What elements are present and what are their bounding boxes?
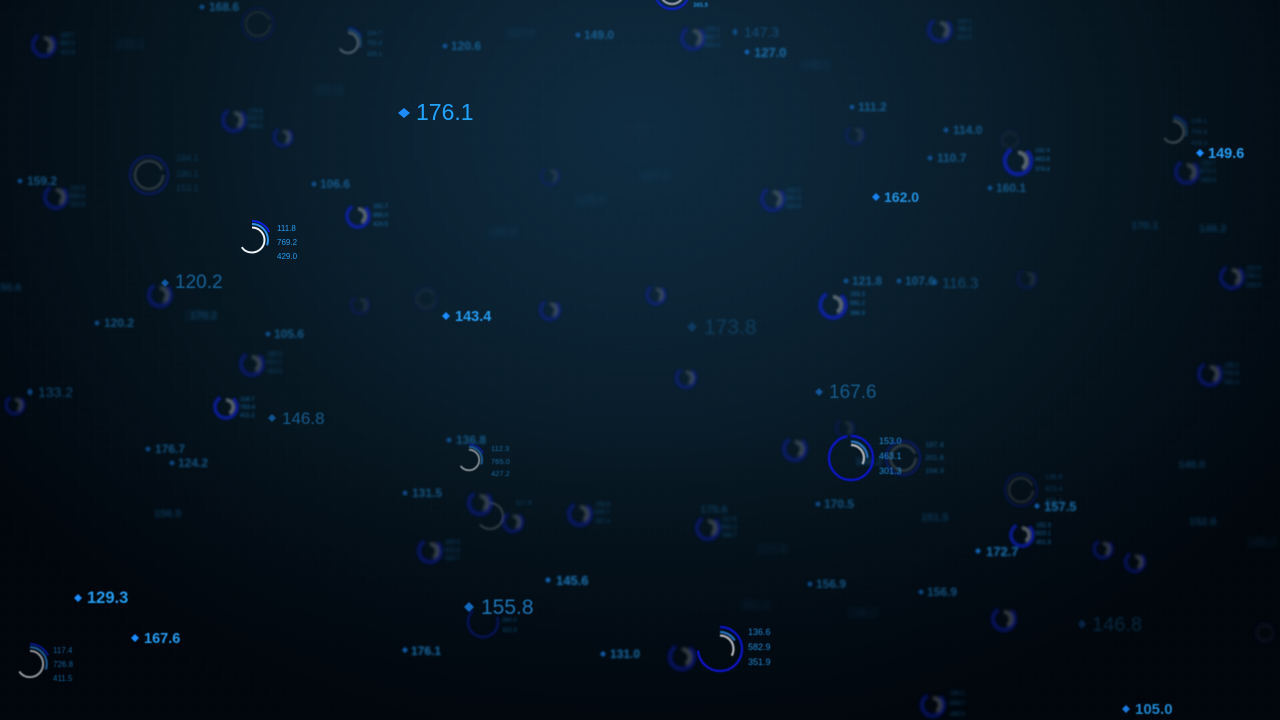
ring readout top center: 365.9 [693,3,709,9]
ring readout 1173 [1157,116,1208,148]
mid-depth blue donuts: 180.5 [267,352,283,358]
small blurred blue donuts with readouts: 161.7 [373,204,389,210]
small blurred data labels: 120.2 [104,316,134,330]
data label 131.0: 131.0 [610,647,640,661]
dim blurred data labels: 175.6 [700,504,728,516]
ring readout 153.0: 153.0 [879,436,902,446]
data label 146.8 left: 146.8 [282,409,325,428]
ring readout 149 left dim: 153.1 [176,183,199,193]
ring readout 469: 765.0 [491,457,510,466]
small blurred blue donuts with readouts: 763.4 [240,405,256,411]
small blurred data labels: 131.5 [412,486,442,500]
data label 172.7: 172.7 [986,544,1019,559]
small blurred data labels: 124.2 [178,456,208,470]
small blurred data labels: 105.6 [274,327,304,341]
small blurred blue donuts with readouts: 401.9 [1036,540,1052,546]
small blurred blue donuts with readouts [215,148,1052,546]
small blurred blue donuts with readouts: 374.4 [1035,167,1051,173]
small blurred blue donuts with readouts: 424.5 [373,222,389,228]
small blurred data labels: 170.5 [824,497,854,511]
faint far data labels [115,26,1277,620]
mid-depth blue donuts: 312.8 [70,202,86,208]
faint far data labels: 171.8 [757,542,787,556]
faint far data labels: 170.2 [184,308,214,322]
faint far data labels: 132.9 [313,83,343,97]
mid-depth blue donuts: 391.4 [1224,380,1240,386]
faint far data labels: 150.8 [505,26,535,40]
dim blurred data labels: 146.2 [1199,223,1227,235]
mid-depth blue donuts: 337.4 [595,519,611,525]
ring readout 153.0 [829,436,902,480]
faint far data labels: 146.0 [1247,535,1277,549]
mid-depth blue donuts: 140.2 [957,19,973,25]
mid-depth blue donuts: 682.7 [705,35,721,41]
small blurred data labels: 156.9 [927,585,957,599]
ring readout 348: 420.1 [367,52,383,58]
mid-depth blue donuts: 580.3 [786,196,802,202]
mid-depth blue donuts: 140.7 [60,33,76,39]
faint far data labels: 108.5 [800,58,830,72]
dim blurred data labels: 152.6 [1189,516,1217,528]
dim blurred data labels: 168.2 [855,456,883,468]
small blurred data labels: 107.6 [905,274,935,288]
small blurred data labels: 149.0 [584,28,614,42]
mid-depth blue donuts: 760.1 [1246,274,1262,280]
data label 143.4: 143.4 [455,309,491,325]
mid-depth blue donuts: 162.9 [1246,266,1262,272]
ring readout 490 faint: 117.6 [515,500,532,507]
ring readout 483: 360.0 [502,618,518,624]
faint far data labels: 156.2 [848,606,878,620]
data label 147.3: 147.3 [744,24,779,40]
mid-depth blue donuts: 765.3 [957,27,973,33]
dim blurred data labels: 151.5 [921,512,949,524]
data label 149.6: 149.6 [1208,146,1244,162]
faint far data labels: 151.0 [740,598,770,612]
ring readout 903: 187.4 [925,440,944,449]
data label 120.2: 120.2 [175,272,223,293]
ring readout 1173: 109.1 [1191,118,1208,125]
small blurred blue donuts with readouts: 366.9 [850,311,866,317]
small blurred data labels: 156.9 [816,577,846,591]
faint far rings [351,126,1274,642]
mid-depth blue donuts: 156.8 [595,502,611,508]
small blurred data labels [17,0,1026,599]
ring readout 903: 201.8 [925,453,944,462]
dim blurred data labels [0,220,1227,528]
faint far data labels: 126.3 [575,193,605,207]
mid-depth blue donuts: 310.7 [445,556,461,562]
ring readout 469: 112.3 [491,444,509,453]
ring readout 1021: 823.4 [1045,486,1063,493]
ring readout 903 [886,440,944,475]
small blurred data labels: 106.6 [320,177,350,191]
faint far data labels: 120.1 [115,37,145,51]
dim blurred data labels: 170.1 [1131,220,1159,232]
data label 157.5: 157.5 [1044,499,1077,514]
small blurred data labels: 176.7 [155,442,185,456]
mid-depth blue donuts: 522.1 [267,360,283,366]
small blurred data labels: 121.8 [852,274,882,288]
ring readout 903: 104.3 [925,466,944,475]
ring readout 30 lower left [10,644,74,684]
mid-depth blue donuts: 398.5 [248,124,264,130]
ring readout 111.8 [233,221,298,261]
mid-depth blue donuts: 412.5 [957,35,973,41]
data label 105.0: 105.0 [1135,701,1173,718]
ring readout 258 top [242,8,274,40]
ring readout 149 left dim: 180.1 [176,169,199,179]
dim blurred data labels: 146.0 [1178,459,1206,471]
mid-depth blue donuts: 422.8 [445,548,461,554]
dim blurred data labels: 156.5 [154,508,182,520]
ring readout 136.6 [698,627,771,671]
dim blurred data labels: 50.6 [0,282,21,294]
small blurred data labels: 160.1 [996,181,1026,195]
ring readout 1173: 754.8 [1191,129,1208,136]
ring readout 469: 427.2 [491,469,510,478]
small blurred data labels: 168.6 [209,0,239,14]
mid-depth blue donuts: 160.9 [445,540,461,546]
ring readout 30 lower left: 726.8 [53,660,74,669]
mid-depth blue donuts: 412.6 [60,50,76,56]
small blurred data labels: 159.2 [27,174,57,188]
ring readout 153.0: 463.1 [879,451,902,461]
mid-depth blue donuts: 410.3 [267,369,283,375]
ring readout 111.8: 429.0 [277,252,298,261]
mid-depth blue donuts: 480.5 [950,712,966,718]
small blurred blue donuts with readouts: 163.3 [850,292,866,298]
data label 155.8: 155.8 [481,596,534,619]
ring readout 153.0: 301.3 [879,466,902,476]
mid-depth blue donuts: 142.1 [786,188,802,194]
data label 116.3: 116.3 [942,275,978,292]
mid-depth blue donuts: 702.6 [1224,371,1240,377]
data label 133.2: 133.2 [38,384,73,400]
small blurred data labels: 136.8 [456,433,486,447]
ring readout 1173: 419.3 [1191,140,1208,147]
ring readout 30 lower left: 411.5 [53,674,73,683]
ring readout 136.6: 351.9 [748,657,771,667]
ring readout 111.8: 111.8 [277,224,296,233]
ring readout 483: 302.9 [502,628,518,634]
mid-depth blue donuts: 155.2 [1224,363,1240,369]
data label 173.8: 173.8 [704,316,757,339]
small blurred data labels: 120.6 [451,39,481,53]
dim blurred data labels: 170.2 [190,310,218,322]
data label 167.6 lower left: 167.6 [144,631,180,647]
small blurred data labels: 114.0 [953,123,983,137]
ring readout 30 lower left: 117.4 [53,646,73,655]
ring readout 136.6: 582.9 [748,642,771,652]
small blurred data labels: 110.7 [937,151,967,165]
ring readout 483 [464,603,518,641]
mid-depth blue donuts: 182.1 [950,691,966,697]
ring readout 1021 [1005,474,1063,506]
mid-depth blue donuts: 560.4 [70,194,86,200]
mid-depth blue donuts: 131.5 [70,186,86,192]
small blurred blue donuts with readouts: 463.6 [1035,157,1051,163]
faint far data labels: 117.2 [640,169,669,183]
data label 167.6 center: 167.6 [829,382,877,403]
ring readout 136.6: 136.6 [748,627,771,637]
mid-depth blue donuts: 620.7 [595,510,611,516]
small blurred blue donuts with readouts: 865.0 [373,213,389,219]
ring readout 348: 752.3 [367,41,383,47]
ring readout 149 left dim: 184.1 [176,153,199,163]
mid-depth blue donuts: 134.1 [705,27,721,33]
mid-depth blue donuts: 175.6 [248,109,264,115]
mid-depth blue donuts: 117.6 [722,517,737,523]
mid-depth blue donuts: 366.7 [722,533,738,539]
ring readout 348: 114.7 [367,31,382,37]
ring readout 469 [453,444,510,478]
small blurred blue donuts with readouts: 192.4 [1035,148,1051,154]
mid-depth blue donuts: 350.4 [705,43,721,49]
mid-depth blue donuts: 428.6 [1246,283,1262,289]
ring readout 1021: 401.2 [1045,498,1063,505]
ring readout top center [655,0,709,9]
faint far data labels: 130.8 [487,225,517,239]
ring readout 348 [333,28,383,58]
small blurred data labels: 111.2 [858,100,887,114]
data label 176.1 lower: 176.1 [411,644,441,658]
ring readout 111.8: 769.2 [277,238,298,247]
mid-depth blue donuts: 408.8 [1201,178,1217,184]
data label 162.0: 162.0 [884,189,919,205]
mid-depth blue donuts: 133.7 [1201,161,1217,167]
data label 145.6: 145.6 [556,573,589,588]
data label 146.8 lower right: 146.8 [1092,614,1142,636]
data label 129.3: 129.3 [87,589,128,607]
mid-depth blue donuts: 672.0 [1201,169,1217,175]
ring readout 490 faint [477,500,532,529]
mid-depth blue donuts: 681.2 [722,525,738,531]
small blurred blue donuts with readouts: 823.1 [1036,531,1052,537]
ring readout 1021: 136.8 [1045,474,1063,481]
small blurred blue donuts with readouts: 581.2 [850,301,866,307]
small blurred blue donuts with readouts: 411.2 [240,413,255,419]
ring readout 149 left dim [130,153,199,194]
data label 176.1: 176.1 [416,99,474,125]
mid-depth blue donuts: 809.7 [950,701,966,707]
data label 127.0: 127.0 [754,45,787,60]
small blurred blue donuts with readouts: 152.3 [1036,523,1052,529]
mid-depth blue donuts: 641.0 [248,116,264,122]
mid-depth blue donuts: 562.2 [60,41,76,47]
small blurred blue donuts with readouts: 118.7 [240,397,255,403]
mid-depth blue donuts: 384.6 [786,204,802,210]
